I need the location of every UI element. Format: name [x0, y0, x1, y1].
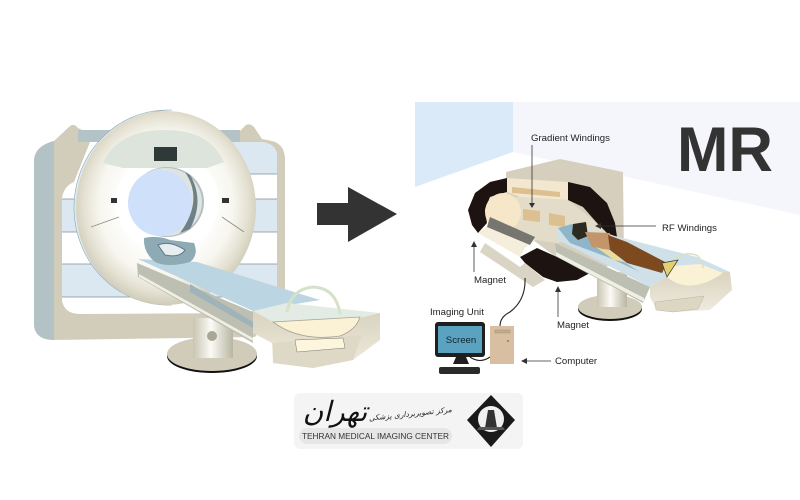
- label: RF Windings: RF Windings: [662, 223, 717, 234]
- left CT scanner illustration: [34, 110, 380, 373]
- coil rack: [487, 217, 535, 245]
- foot arch: [673, 254, 703, 268]
- black magnet ring: right: [568, 182, 617, 237]
- monitor icon: Screen: [446, 335, 476, 346]
- logo english name pill: TEHRAN MEDICAL IMAGING CENTER: [302, 431, 449, 441]
- label: Computer: Computer: [555, 356, 598, 367]
- black magnet ring: left: [468, 178, 507, 233]
- label: RF Windings: [595, 223, 717, 234]
- logo badge: [294, 393, 523, 449]
- label: Imaging Unit: Imaging Unit: [430, 307, 484, 318]
- logo emblem: [467, 395, 515, 447]
- label: Magnet bottom: Magnet: [557, 320, 589, 331]
- legs: [608, 235, 667, 273]
- logo persian city name: تهران: [303, 395, 370, 428]
- scanner rear housing: [34, 124, 285, 340]
- scanner bore: [128, 167, 204, 237]
- logo english name pill: [299, 428, 452, 444]
- label: Gradient Windings: Gradient Windings: [531, 133, 610, 144]
- scanner gantry ring: [74, 110, 256, 305]
- arrow: [317, 187, 397, 242]
- head rest: [144, 237, 196, 265]
- table: [555, 227, 732, 312]
- MRI machine cutaway: [468, 159, 732, 321]
- scanner pedestal: [167, 318, 257, 373]
- black magnet ring: bottom: [520, 248, 590, 282]
- patient table: [137, 259, 320, 343]
- background wedge: lavender: [513, 102, 800, 215]
- gantry side markers: [91, 198, 244, 232]
- inner cutaway face: [490, 197, 607, 243]
- arm: [596, 247, 624, 262]
- gradient winding panels: [523, 209, 565, 227]
- lower tray: [480, 243, 545, 287]
- torso: [585, 232, 610, 250]
- pedestal: [578, 272, 642, 321]
- gantry top display panel: [103, 130, 224, 168]
- label: Magnet left: [471, 241, 506, 286]
- monitor icon: [435, 322, 485, 374]
- logo persian name: مرکز تصویربرداری پزشکی: [368, 405, 452, 423]
- MR heading: MR: [677, 115, 773, 185]
- label: Magnet bottom: [555, 286, 589, 331]
- computer tower icon: [490, 326, 514, 364]
- upper heater strip: [512, 187, 560, 197]
- magnet housing: [506, 159, 624, 270]
- pillow: [558, 224, 640, 272]
- cables: [470, 278, 525, 360]
- label: Gradient Windings: [529, 133, 610, 208]
- label: Computer: [521, 356, 598, 367]
- top cream band: [507, 178, 568, 200]
- background wedge: blue: [415, 102, 513, 187]
- patient: [558, 222, 703, 277]
- lower cream slab: [478, 224, 535, 257]
- table head end: [253, 287, 380, 368]
- cream bore circle: [485, 193, 521, 231]
- foot: [662, 260, 678, 277]
- head: [572, 222, 588, 240]
- label: Magnet left: Magnet: [474, 275, 506, 286]
